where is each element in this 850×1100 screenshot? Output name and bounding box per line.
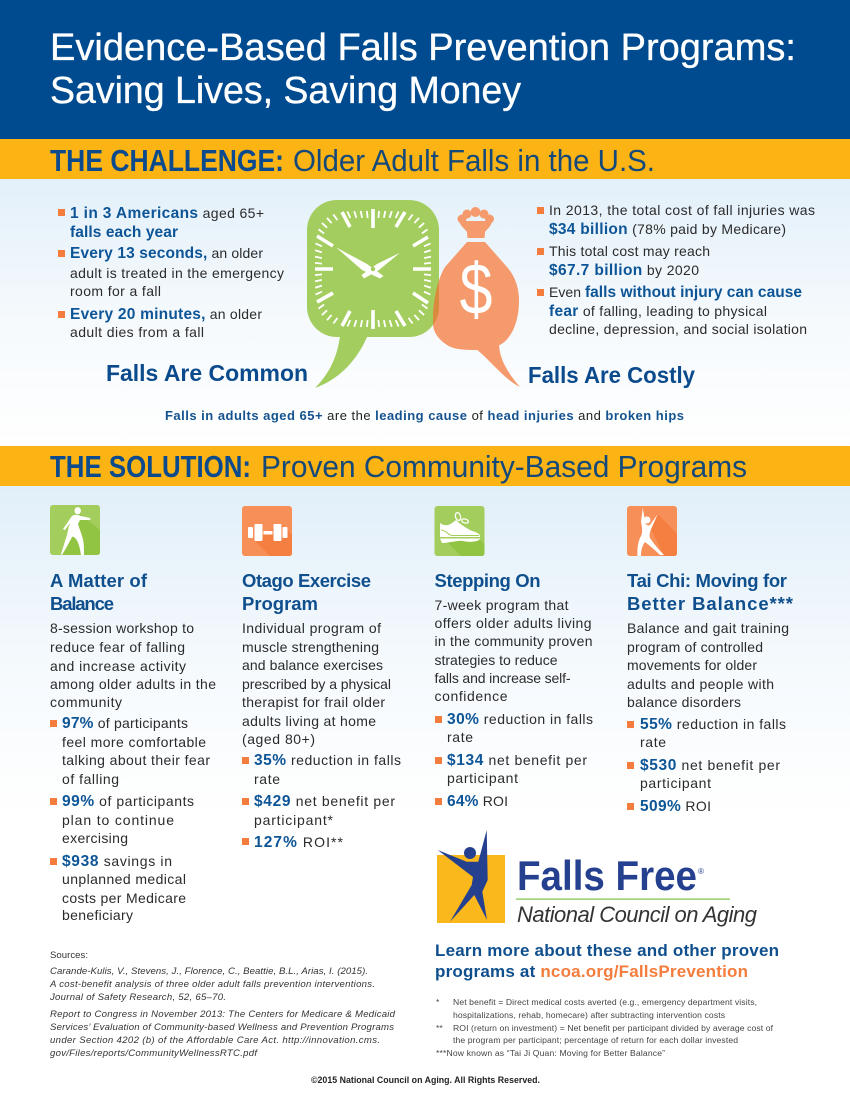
call to action: programs at ncoa.org/FallsPrevention bbox=[435, 962, 748, 981]
heading: the solution: THE SOLUTION: bbox=[50, 449, 251, 484]
panel: falls are common facts bbox=[58, 205, 284, 340]
panel: tai chi: 509% ROI bbox=[640, 798, 711, 815]
panel: tai chi: Better Balance*** bbox=[627, 593, 794, 614]
sources: Services’ Evaluation of Community-based Wellness and Prevention Programs bbox=[50, 1022, 394, 1033]
panel: a matter of balance bbox=[50, 570, 216, 923]
logo: falls free bbox=[437, 830, 758, 927]
copyright: ©2015 National Council on Aging. All Rights Reserved. bbox=[311, 1075, 540, 1085]
heading: falls are common: Falls Are Common bbox=[106, 360, 308, 386]
panel: otago exercise program: Otago Exercise bbox=[242, 570, 371, 591]
panel: a matter of balance: exercising bbox=[62, 830, 128, 846]
panel: stepping on bbox=[434, 570, 593, 810]
panel: a matter of balance: 99% of participants bbox=[62, 793, 194, 810]
heading: the solution: Proven Community-Based Programs bbox=[261, 449, 747, 484]
panel: otago exercise program: 35% reduction in falls bbox=[254, 752, 401, 769]
panel: falls are costly facts: Even falls without injury can cause bbox=[549, 284, 802, 301]
panel: otago exercise program: 127% ROI** bbox=[254, 834, 344, 851]
sources: under Section 4202 (b) of the Affordable Care Act. http://innovation.cms. bbox=[50, 1035, 380, 1046]
panel: otago exercise program: $429 net benefit per bbox=[254, 793, 395, 810]
footnotes: ** bbox=[436, 1023, 443, 1033]
panel: otago exercise program bbox=[242, 570, 401, 851]
panel: tai chi: movements for older bbox=[627, 657, 757, 673]
panel: a matter of balance: beneficiary bbox=[62, 907, 133, 923]
panel: tai chi: 55% reduction in falls bbox=[640, 716, 786, 733]
panel: stepping on: $134 net benefit per bbox=[447, 752, 587, 769]
panel: falls are common facts: Every 20 minutes, an older bbox=[70, 306, 262, 323]
logo: falls free: ® bbox=[698, 867, 704, 876]
title banner: Saving Lives, Saving Money bbox=[50, 70, 521, 112]
footnotes: ***Now known as “Tai Ji Quan: Moving for Better Balance” bbox=[436, 1048, 665, 1058]
section backgrounds bbox=[0, 179, 850, 816]
panel: tai chi: Balance and gait training bbox=[627, 620, 789, 636]
panel: a matter of balance: community bbox=[50, 694, 122, 710]
panel: stepping on: offers older adults living bbox=[434, 615, 592, 631]
panel: a matter of balance: feel more comfortable bbox=[62, 734, 206, 750]
panel: a matter of balance: of falling bbox=[62, 771, 119, 787]
panel: otago exercise program: adults living at home bbox=[242, 713, 376, 729]
panel: falls are common facts: adult dies from a fall bbox=[70, 324, 204, 340]
logo: falls free: Falls Free bbox=[517, 852, 697, 899]
panel: stepping on: participant bbox=[447, 770, 518, 786]
icon: money bag speech bubble: $ bbox=[460, 248, 492, 329]
panel: falls are costly facts: This total cost may reach bbox=[549, 243, 710, 259]
panel: falls are common facts: 1 in 3 Americans aged 65+ bbox=[70, 205, 264, 222]
panel: otago exercise program: muscle strengthening bbox=[242, 639, 379, 655]
panel: tai chi: adults and people with bbox=[627, 676, 774, 692]
sources: A cost-benefit analysis of three older adult falls prevention interventions. bbox=[49, 979, 375, 990]
panel: otago exercise program: prescribed by a physical bbox=[242, 676, 391, 692]
footnotes: ROI (return on investment) = Net benefit per participant divided by average cost of bbox=[453, 1023, 774, 1033]
panel: a matter of balance: Balance bbox=[50, 593, 114, 614]
logo: falls free: National Council on Aging bbox=[517, 902, 758, 927]
title banner bbox=[0, 0, 850, 139]
panel: falls are common facts: room for a fall bbox=[70, 283, 161, 299]
panel: tai chi: program of controlled bbox=[627, 639, 763, 655]
panel: a matter of balance: 8-session workshop to bbox=[50, 620, 194, 636]
icon: dumbbell bbox=[242, 506, 292, 556]
icon: walking person bbox=[50, 505, 100, 555]
heading: the challenge: THE CHALLENGE: bbox=[50, 143, 284, 178]
panel: falls are costly facts: decline, depression, and social isolation bbox=[549, 321, 807, 337]
panel: tai chi bbox=[627, 570, 794, 815]
sources: gov/Files/reports/CommunityWellnessRTC.pdf bbox=[50, 1048, 258, 1059]
heading: the challenge bbox=[0, 139, 850, 179]
panel: a matter of balance: plan to continue bbox=[62, 812, 174, 828]
panel: a matter of balance: $938 savings in bbox=[62, 853, 172, 870]
panel: tai chi: participant bbox=[640, 775, 711, 791]
icon: shoe bbox=[434, 506, 484, 556]
panel: falls are costly facts: $67.7 billion by 2020 bbox=[549, 262, 699, 279]
sources: Journal of Safety Research, 52, 65–70. bbox=[49, 992, 226, 1003]
panel: a matter of balance: reduce fear of falling bbox=[50, 639, 185, 655]
panel: falls are common facts: falls each year bbox=[70, 224, 178, 241]
panel: stepping on: 30% reduction in falls bbox=[447, 711, 593, 728]
call to action bbox=[435, 941, 779, 981]
footnotes: hospitalizations, rehab, homecare) after subtracting intervention costs bbox=[453, 1010, 725, 1020]
panel: tai chi: rate bbox=[640, 734, 666, 750]
panel: a matter of balance: and increase activity bbox=[50, 658, 186, 674]
panel: otago exercise program: therapist for frail older bbox=[242, 694, 385, 710]
panel: otago exercise program: Individual program of bbox=[242, 620, 381, 636]
panel: falls are costly facts: $34 billion (78% paid by Medicare) bbox=[549, 221, 786, 238]
icon: tai chi figure bbox=[627, 506, 677, 556]
heading: the solution bbox=[0, 446, 850, 486]
panel: otago exercise program: (aged 80+) bbox=[242, 731, 315, 747]
panel: falls are costly facts: fear of falling, leading to physical bbox=[549, 303, 767, 320]
footnotes bbox=[436, 997, 774, 1058]
panel: stepping on: confidence bbox=[434, 688, 508, 704]
sources: Carande-Kulis, V., Stevens, J., Florence, C., Beattie, B.L., Arias, I. (2015). bbox=[50, 966, 368, 977]
callout: leading cause: Falls in adults aged 65+ are the leading cause of head injuries and broken hips bbox=[165, 408, 684, 423]
footnotes: the program per participant; percentage of return for each dollar invested bbox=[453, 1035, 738, 1045]
icon: money bag speech bubble bbox=[433, 207, 520, 387]
panel: falls are costly facts bbox=[537, 202, 815, 337]
panel: a matter of balance: A Matter of bbox=[50, 570, 148, 591]
panel: falls are common facts: Every 13 seconds, an older bbox=[70, 245, 263, 262]
call to action: Learn more about these and other proven bbox=[435, 941, 779, 960]
panel: falls are costly facts: In 2013, the total cost of fall injuries was bbox=[549, 202, 815, 218]
sources: Sources: bbox=[50, 950, 88, 961]
panel: otago exercise program: participant* bbox=[254, 812, 334, 828]
panel: stepping on: rate bbox=[447, 729, 473, 745]
panel: tai chi: $530 net benefit per bbox=[640, 757, 780, 774]
footnotes: Net benefit = Direct medical costs averted (e.g., emergency department visits, bbox=[453, 997, 757, 1007]
panel: a matter of balance: talking about their fear bbox=[62, 752, 210, 768]
panel: stepping on: falls and increase self- bbox=[434, 670, 571, 686]
panel: tai chi: Tai Chi: Moving for bbox=[627, 570, 787, 591]
footnotes: * bbox=[436, 997, 440, 1007]
panel: otago exercise program: Program bbox=[242, 593, 318, 614]
panel: stepping on: in the community proven bbox=[434, 633, 592, 649]
panel: stepping on: 64% ROI bbox=[447, 793, 508, 810]
panel: a matter of balance: unplanned medical bbox=[62, 871, 186, 887]
panel: otago exercise program: rate bbox=[254, 771, 280, 787]
heading: falls are costly: Falls Are Costly bbox=[528, 362, 695, 388]
panel: stepping on: 7-week program that bbox=[434, 597, 569, 613]
panel: a matter of balance: costs per Medicare bbox=[62, 890, 186, 906]
heading: the challenge: Older Adult Falls in the U.S. bbox=[293, 143, 655, 178]
panel: stepping on: strategies to reduce bbox=[434, 652, 558, 668]
panel: falls are common facts: adult is treated in the emergency bbox=[70, 265, 284, 281]
title banner: Evidence-Based Falls Prevention Programs: bbox=[50, 27, 796, 69]
panel: a matter of balance: 97% of participants bbox=[62, 715, 188, 732]
panel: a matter of balance: among older adults in the bbox=[50, 676, 216, 692]
panel: tai chi: balance disorders bbox=[627, 694, 741, 710]
panel: stepping on: Stepping On bbox=[434, 570, 540, 591]
sources bbox=[49, 950, 396, 1059]
panel: otago exercise program: and balance exercises bbox=[242, 657, 383, 673]
icon: clock speech bubble bbox=[307, 200, 439, 388]
sources: Report to Congress in November 2013: The Centers for Medicare & Medicaid bbox=[50, 1009, 396, 1020]
